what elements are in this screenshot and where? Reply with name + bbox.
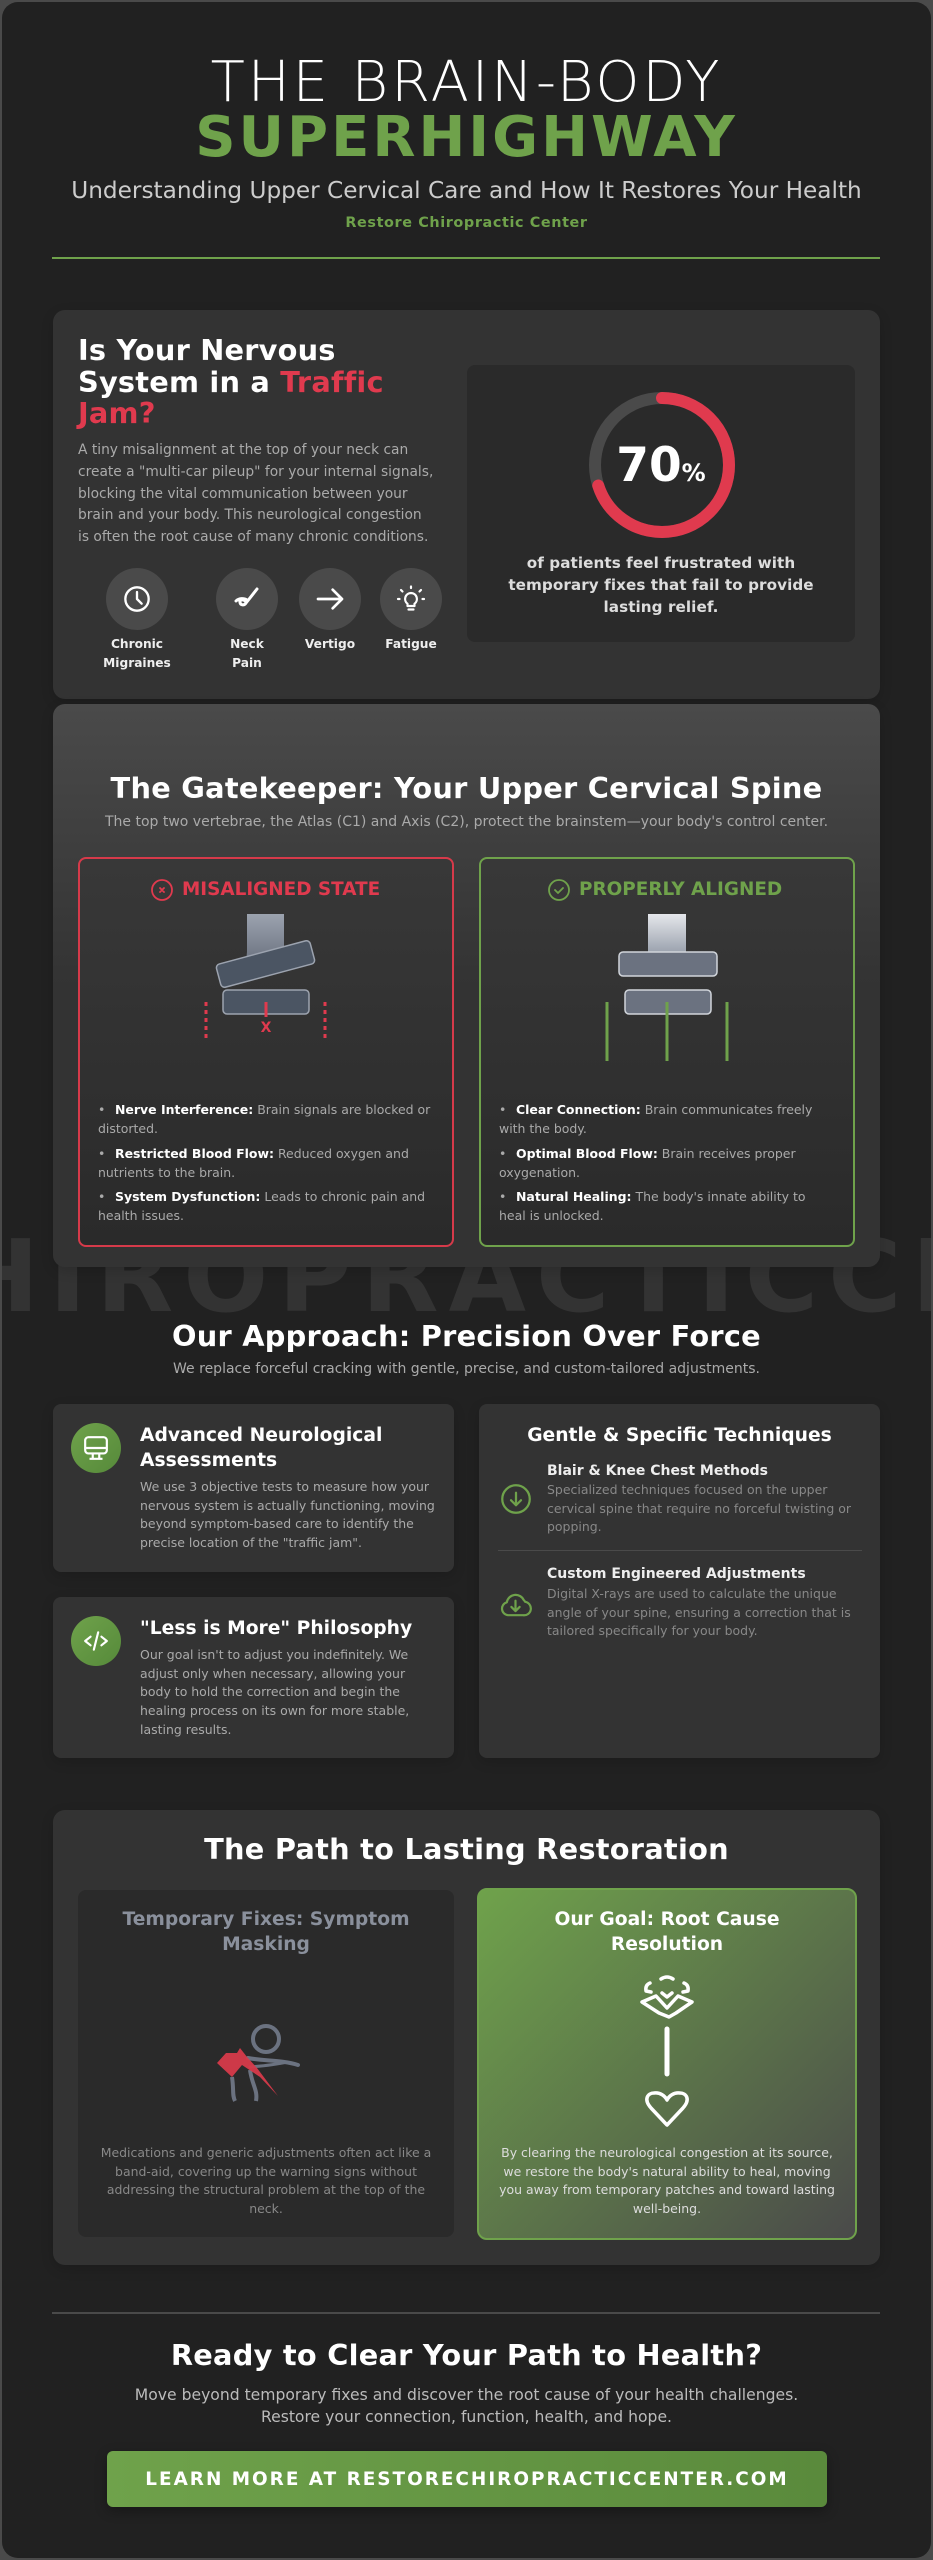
symptom: vertigo [299,568,361,630]
panel: path to restoration [53,1810,880,2265]
text [140,1479,435,1550]
text: Medications and generic adjustments often act like a [101,2145,431,2160]
call to action button: LEARN MORE AT RESTORECHIROPRACTICCENTER.COM [145,2469,789,2490]
bullet list: • [98,1146,105,1161]
card heading: MISALIGNED STATE [182,879,380,900]
title: Resolution [611,1934,723,1955]
diagram: aligned vertebrae [606,914,728,1061]
bullet list [499,1102,812,1223]
bullet list [98,1102,430,1223]
title: Assessments [140,1450,277,1471]
paragraph: is often the root cause of many chronic conditions. [78,529,428,545]
title [554,1909,780,1955]
stat caption: temporary fixes that fail to provide [508,576,814,594]
text: lasting results. [140,1722,231,1737]
heading: The Path to Lasting Restoration [204,1832,729,1866]
heading: The Gatekeeper: Your Upper Cervical Spine [111,771,822,805]
title [140,1425,382,1471]
label: neck pain [230,637,264,670]
text: We use 3 objective tests to measure how your [140,1479,429,1494]
bullet list: heal is unlocked. [499,1208,604,1223]
label: fatigue: Fatigue [385,637,437,651]
heading: Is Your Nervous [78,333,336,367]
text: well-being. [633,2201,701,2216]
icon: arrow down circle [501,1484,531,1514]
footer rule [52,2312,880,2314]
bullet list: • [499,1189,506,1204]
bullet list: • [499,1146,506,1161]
bullet list: distorted. [98,1121,158,1136]
bullet list: Natural Healing: The body's innate ability to [516,1189,806,1204]
title [122,1909,410,1955]
technique 2 title: Custom Engineered Adjustments [547,1566,806,1582]
symptom: chronic migraines [106,568,168,630]
footer text: Move beyond temporary fixes and discover the root cause of your health challenges. [135,2386,798,2404]
technique 2 text: angle of your spine, ensuring a correction that is [547,1605,851,1620]
card: assessments [53,1404,454,1572]
text: band-aid, covering up the warning signs without [115,2164,417,2179]
text: we restore the body's natural ability to heal, moving [503,2164,831,2179]
footer text [135,2386,798,2426]
heading [76,333,384,430]
subheading: our approach: We replace forceful cracking with gentle, precise, and custom-tailored adjustments. [173,1361,760,1377]
technique 1 text: cervical spine that require no forceful twisting or [547,1501,851,1516]
card: root cause [477,1888,857,2240]
stat caption [508,554,814,616]
icon: cloud download [500,1594,532,1616]
card: less is more [53,1597,454,1758]
technique 1 text: popping. [547,1519,602,1534]
technique 1 title: Blair & Knee Chest Methods [547,1463,768,1479]
title: Gentle & Specific Techniques [527,1425,832,1446]
technique 2 text: Digital X-rays are used to calculate the unique [547,1586,837,1601]
label: vertigo: Vertigo [305,637,355,651]
title line 1: THE BRAIN-BODY [211,50,722,115]
bullet list: • [98,1189,105,1204]
subheading: The top two vertebrae, the Atlas (C1) and Axis (C2), protect the brainstem—your body's control center. [105,814,828,830]
text: nervous system is actually functioning, moving [140,1498,435,1513]
technique 1 text [547,1482,851,1534]
label: chronic migraines: Chronic [111,637,163,651]
text: adjust only when necessary, allowing your [140,1666,405,1681]
title line 2: SUPERHIGHWAY [195,105,738,170]
panel: 70 percent stat [467,365,855,642]
stat caption: lasting relief. [603,598,719,616]
bullet list: Nerve Interference: Brain signals are blocked or [115,1102,430,1117]
text [101,2145,431,2216]
icon: x circle [151,879,173,901]
technique 2 text: tailored specifically for your body. [547,1623,758,1638]
paragraph: create a "multi-car pileup" for your internal signals, [78,464,433,480]
title: Our Goal: Root Cause [554,1909,780,1930]
text [499,2145,835,2216]
bullet list: oxygenation. [499,1165,580,1180]
bullet list: nutrients to the brain. [98,1165,235,1180]
paragraph: blocking the vital communication between your [78,486,408,502]
paragraph: brain and your body. This neurological congestion [78,507,422,523]
bullet list: • [499,1102,506,1117]
bullet list: Restricted Blood Flow: Reduced oxygen and [115,1146,409,1161]
heading: Jam? [78,396,156,430]
text: Our goal isn't to adjust you indefinitely. We [140,1647,408,1662]
title: "Less is More" Philosophy [140,1618,412,1639]
panel: traffic jam [53,310,880,699]
illustration: masked figure [217,2024,300,2102]
heading: our approach: Our Approach: Precision Over Force [172,1319,761,1353]
progress ring [589,392,735,538]
bullet list: System Dysfunction: Leads to chronic pain and [115,1189,425,1204]
text: By clearing the neurological congestion at its source, [501,2145,833,2160]
paragraph: A tiny misalignment at the top of your neck can [78,442,408,458]
clinic name: Restore Chiropractic Center [345,215,588,231]
footer heading: Ready to Clear Your Path to Health? [171,2338,762,2372]
diagram: misaligned vertebrae [204,914,326,1038]
bullet list: Optimal Blood Flow: Brain receives proper [516,1146,796,1161]
illustration: healing pathway [640,1975,694,2127]
card: misaligned [78,857,454,1247]
bullet list: with the body. [499,1121,587,1136]
card: techniques [479,1404,880,1758]
card heading: PROPERLY ALIGNED [579,879,782,900]
card: aligned [479,857,855,1247]
diagram: misaligned vertebrae: X [261,1020,272,1036]
icon: check circle [548,879,570,901]
card: temporary fixes [78,1890,454,2237]
text: healing process on its own for more stable, [140,1703,409,1718]
text: beyond symptom-based care to identify the [140,1516,414,1531]
call to action button [107,2451,827,2507]
symptom: neck pain [216,568,278,630]
text [140,1647,409,1737]
label: chronic migraines [103,637,171,670]
text: addressing the structural problem at the top of the [107,2182,425,2197]
bullet list: Clear Connection: Brain communicates freely [516,1102,812,1117]
label: neck pain: Pain [232,656,262,670]
text: precise location of the "traffic jam". [140,1535,362,1550]
paragraph [78,442,433,545]
bullet list: • [98,1102,105,1117]
symptom: fatigue [380,568,442,630]
footer text: Restore your connection, function, health, and hope. [261,2408,672,2426]
title: Temporary Fixes: Symptom [122,1909,410,1930]
header rule [52,257,880,259]
bullet list: health issues. [98,1208,184,1223]
stat caption: of patients feel frustrated with [527,554,795,572]
title: Advanced Neurological [140,1425,382,1446]
text: neck. [249,2201,283,2216]
label: neck pain: Neck [230,637,264,651]
label: chronic migraines: Migraines [103,656,171,670]
icon: monitor [71,1423,121,1473]
panel: gatekeeper [53,704,880,1267]
subtitle: Understanding Upper Cervical Care and How It Restores Your Health [71,177,862,204]
title: Masking [222,1934,310,1955]
icon: code [71,1616,121,1666]
technique 2 text [547,1586,851,1638]
technique 1 text: Specialized techniques focused on the upper [547,1482,827,1497]
heading: System in a Traffic [78,365,384,399]
stat number: 70% [616,438,706,493]
text: you away from temporary patches and toward lasting [499,2182,835,2197]
text: body to hold the correction and begin the [140,1684,400,1699]
